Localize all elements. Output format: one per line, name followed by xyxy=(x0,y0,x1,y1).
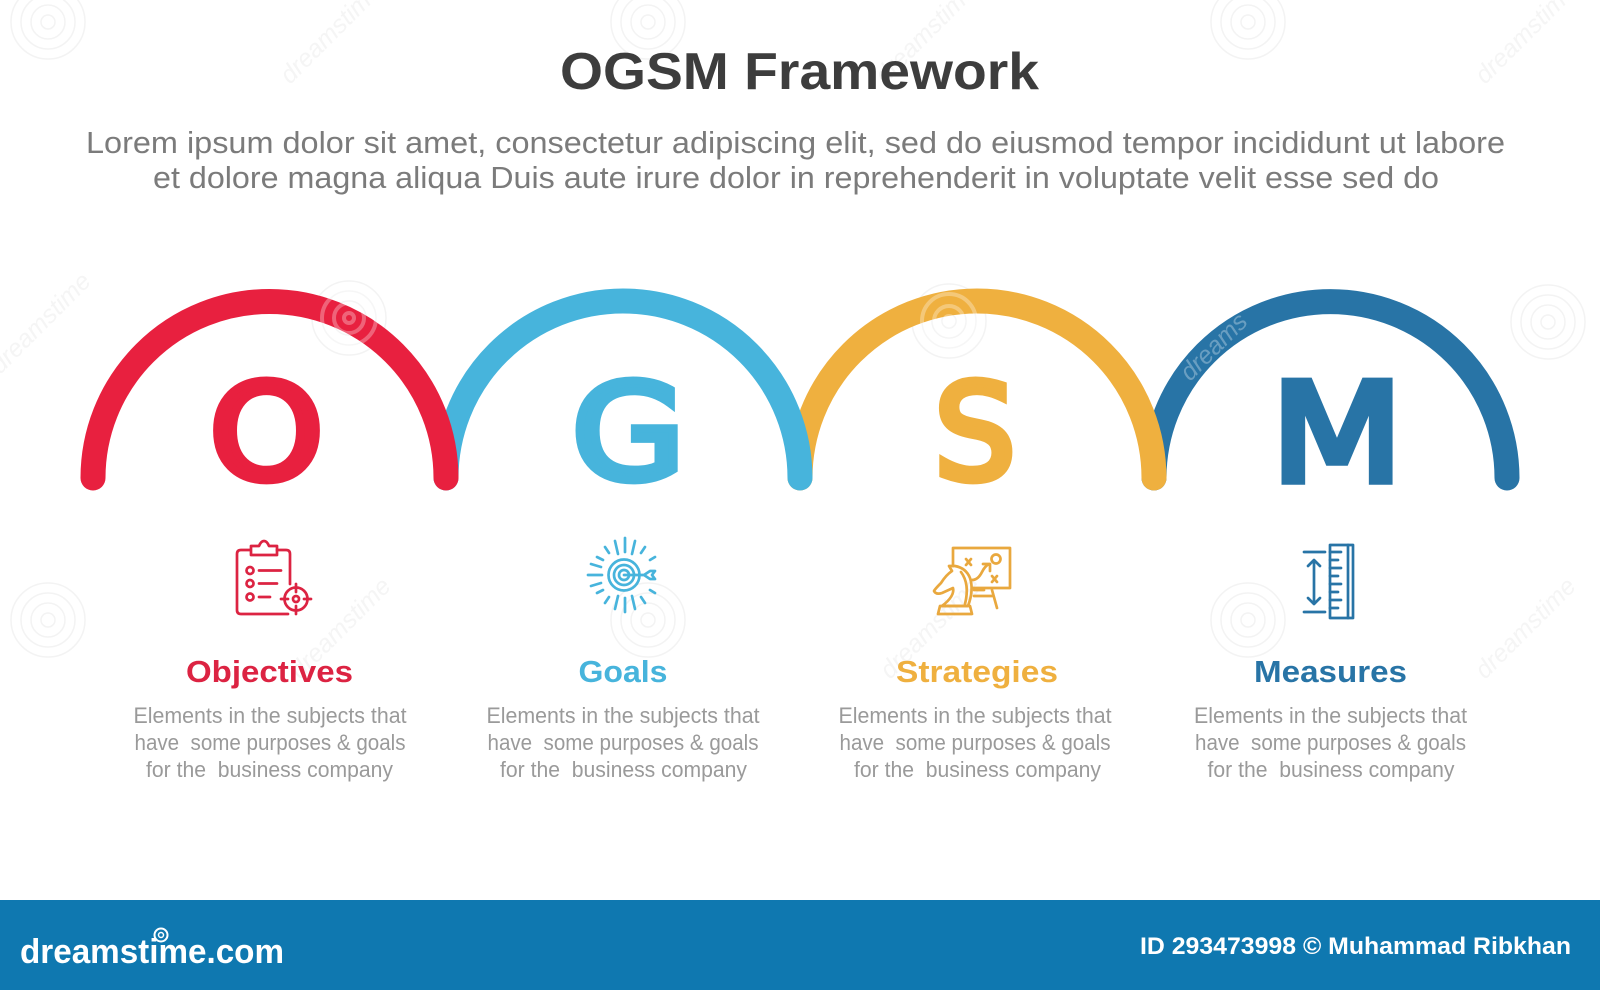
arch: measures xyxy=(1154,302,1507,478)
description: goals: have some purposes & goals xyxy=(488,730,758,755)
description: goals: Elements in the subjects that xyxy=(486,703,760,728)
big letter S: S xyxy=(934,356,1016,510)
description: objectives xyxy=(134,703,407,782)
infographic canvas: dreamstime xyxy=(874,572,987,684)
label: measures: Measures xyxy=(1254,654,1407,689)
big letter O: O xyxy=(209,356,324,510)
label: strategies: Strategies xyxy=(896,654,1058,689)
arch: goals xyxy=(446,301,800,478)
footer credit: ID 293473998 © Muhammad Ribkhan xyxy=(1140,933,1571,960)
description: measures: for the business company xyxy=(1208,757,1455,782)
icon: ruler with height arrow xyxy=(1304,545,1353,618)
arch: strategies xyxy=(800,301,1154,478)
big letter M: M xyxy=(1271,356,1403,514)
description: strategies: for the business company xyxy=(854,757,1102,782)
footer bar xyxy=(0,900,1600,990)
description: objectives: have some purposes & goals xyxy=(134,730,406,755)
infographic canvas: dreamstime xyxy=(1469,572,1582,684)
arch: objectives xyxy=(93,302,446,478)
description: measures xyxy=(1194,703,1468,782)
icon: clipboard with target xyxy=(237,541,311,614)
description: objectives: Elements in the subjects that xyxy=(134,703,407,728)
description: strategies: have some purposes & goals xyxy=(840,730,1110,755)
subtitle paragraph xyxy=(86,125,1505,195)
label: objectives: Objectives xyxy=(186,654,353,689)
icon: chess knight and strategy board xyxy=(934,548,1010,614)
description: goals xyxy=(486,703,760,782)
title: OGSM Framework xyxy=(560,43,1039,101)
footer logo: dreamstime.com xyxy=(20,933,284,971)
subtitle paragraph: et dolore magna aliqua Duis aute irure dolor in reprehenderit in voluptate velit esse sed do xyxy=(153,160,1439,195)
description: measures: have some purposes & goals xyxy=(1195,730,1466,755)
label: goals: Goals xyxy=(578,654,668,689)
big letter G: G xyxy=(572,356,685,510)
description: goals: for the business company xyxy=(500,757,748,782)
description: strategies: Elements in the subjects that xyxy=(838,703,1112,728)
description: strategies xyxy=(838,703,1112,782)
infographic canvas: dreamstime xyxy=(284,572,397,684)
description: measures: Elements in the subjects that xyxy=(1194,703,1468,728)
icon: target with rays xyxy=(588,538,655,612)
infographic canvas: dreams xyxy=(1174,307,1253,386)
subtitle paragraph: Lorem ipsum dolor sit amet, consectetur adipiscing elit, sed do eiusmod tempor incididunt ut labore xyxy=(86,125,1505,160)
description: objectives: for the business company xyxy=(146,757,394,782)
